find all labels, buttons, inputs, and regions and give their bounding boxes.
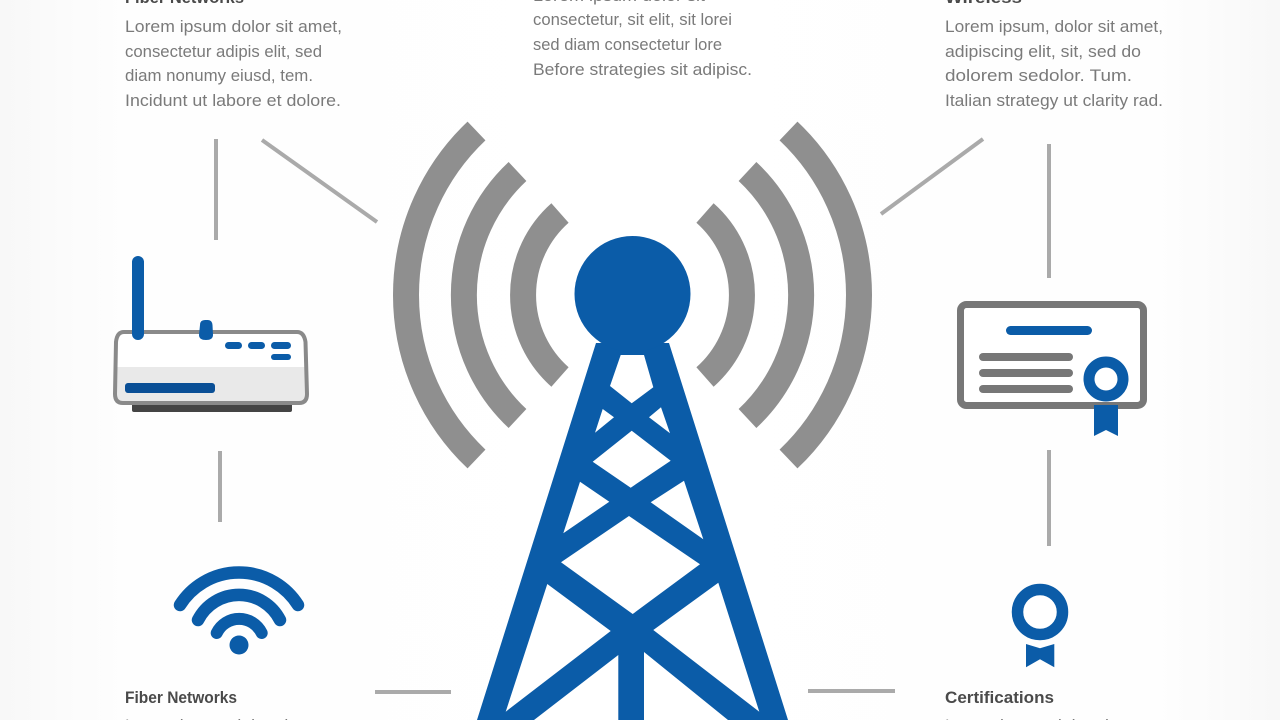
heading: bottom right: Certifications <box>945 688 1054 707</box>
body text: top left: Lorem ipsum dolor sit amet, <box>125 17 342 36</box>
router knob <box>199 320 213 340</box>
body text: top left: diam nonumy eiusd, tem. <box>125 66 313 85</box>
certificate text lines <box>979 353 1073 393</box>
certificate seal <box>1089 362 1123 396</box>
certificate ribbon <box>1094 405 1118 436</box>
text block: top centre: Before strategies sit adipisc. <box>533 60 752 79</box>
body text: top right <box>945 17 1163 110</box>
body text: top left: Incidunt ut labore et dolore. <box>125 91 341 110</box>
router antenna <box>132 256 144 340</box>
icon: router <box>115 256 307 412</box>
tower top sphere <box>574 236 690 352</box>
text block: top left <box>125 0 342 110</box>
icon: award ribbon <box>1018 590 1062 667</box>
router lights <box>225 342 291 360</box>
body text: top left <box>125 17 342 110</box>
certificate title bar <box>1006 326 1092 335</box>
body text: top right: Lorem ipsum, dolor sit amet, <box>945 17 1163 36</box>
text block: top centre: sed diam consectetur lore <box>533 35 722 54</box>
text block: top right <box>945 0 1163 110</box>
signal waves: left <box>406 131 560 459</box>
signal waves: right <box>705 131 859 459</box>
body text: top right: Italian strategy ut clarity rad. <box>945 91 1163 110</box>
text block: bottom left <box>125 688 342 720</box>
icon: wifi <box>180 572 298 654</box>
body text: top right: dolorem sedolor. Tum. <box>945 66 1132 85</box>
body text: top right: adipiscing elit, sit, sed do <box>945 42 1141 61</box>
router slot <box>125 383 215 393</box>
icon: transmission tower <box>477 236 788 720</box>
connector lines <box>216 139 1049 692</box>
text block: top centre <box>533 0 752 79</box>
text block: bottom right <box>945 688 1163 720</box>
text block: top centre: consectetur, sit elit, sit lorei <box>533 10 732 29</box>
body text: top left: consectetur adipis elit, sed <box>125 42 322 61</box>
icon: certificate <box>960 304 1144 436</box>
heading: bottom left: Fiber Networks <box>125 688 237 707</box>
